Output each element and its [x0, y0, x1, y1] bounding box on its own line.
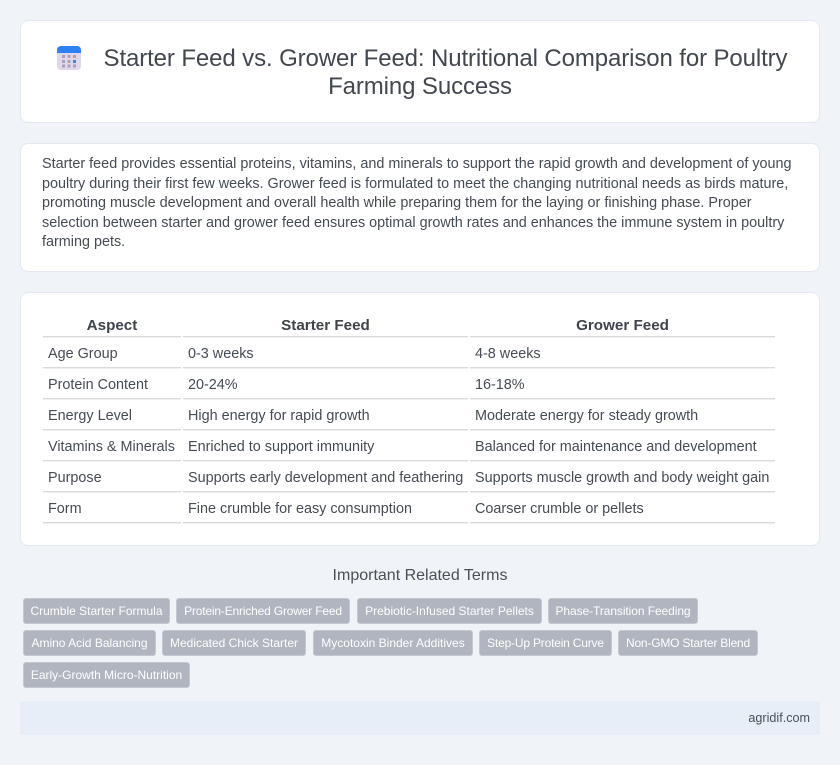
- tag: [479, 630, 612, 656]
- row: purpose: Purpose: [48, 470, 102, 486]
- row: energy level: High energy for rapid growth: [188, 408, 370, 424]
- column headers: Aspect: [87, 317, 137, 334]
- tag: Crumble Starter Formula: [30, 604, 163, 618]
- row: form: [43, 501, 775, 524]
- footer source: agridif.com: [748, 711, 810, 725]
- tag: Mycotoxin Binder Additives: [321, 636, 465, 650]
- row: vitamins and minerals: Enriched to support immunity: [188, 439, 374, 455]
- heading: important related terms: Important Related Terms: [333, 567, 507, 584]
- tag: Step-Up Protein Curve: [487, 636, 604, 650]
- row: protein content: 20-24%: [188, 377, 238, 393]
- text block: introduction: promoting muscle development and overall health while preparing them for the laying or finishing phase. Proper: [42, 195, 752, 211]
- row: form: Fine crumble for easy consumption: [188, 501, 412, 517]
- row: form: Coarser crumble or pellets: [475, 501, 644, 517]
- text block: introduction: farming pets.: [42, 234, 125, 250]
- row: age group: Age Group: [48, 346, 118, 362]
- tag: [23, 598, 170, 624]
- tag: [23, 630, 156, 656]
- title: Starter Feed vs. Grower Feed: Nutritional Comparison for Poultry: [104, 45, 787, 72]
- column headers: Grower Feed: [576, 317, 669, 334]
- tag: [618, 630, 758, 656]
- row: age group: 0-3 weeks: [188, 346, 254, 362]
- row: purpose: Supports muscle growth and body weight gain: [475, 470, 769, 486]
- column headers: [43, 317, 775, 338]
- row: vitamins and minerals: [43, 439, 775, 462]
- footer bar: [20, 701, 820, 735]
- tag: Amino Acid Balancing: [31, 636, 148, 650]
- row: age group: [43, 346, 775, 369]
- tag: Non-GMO Starter Blend: [626, 636, 750, 650]
- text block: introduction: Starter feed provides essential proteins, vitamins, and minerals to support the rapid growth and development of young: [42, 156, 792, 172]
- tag: [162, 630, 306, 656]
- title: [104, 45, 788, 100]
- row: purpose: [43, 470, 775, 493]
- column headers: Starter Feed: [281, 317, 370, 334]
- row: vitamins and minerals: Balanced for maintenance and development: [475, 439, 757, 455]
- row: age group: 4-8 weeks: [475, 346, 541, 362]
- row: protein content: [43, 377, 775, 400]
- panel: comparison table card: [20, 292, 820, 546]
- tag: Phase-Transition Feeding: [555, 604, 691, 618]
- icon: calendar: [57, 46, 81, 70]
- tag: [357, 598, 542, 624]
- tag: [313, 630, 473, 656]
- tag: [176, 598, 350, 624]
- tag: Protein-Enriched Grower Feed: [184, 604, 342, 618]
- row: energy level: Moderate energy for steady growth: [475, 408, 698, 424]
- panel: introduction card: [20, 143, 820, 272]
- tag list: related terms: [23, 598, 758, 688]
- title: Farming Success: [328, 73, 512, 100]
- text block: introduction: [42, 156, 792, 250]
- text block: introduction: poultry during their first few weeks. Grower feed is formulated to meet the changing nutritional needs as birds mature,: [42, 176, 788, 192]
- table: comparison: [43, 317, 775, 524]
- panel: title card: [20, 20, 820, 123]
- tag: Prebiotic-Infused Starter Pellets: [365, 604, 534, 618]
- row: energy level: Energy Level: [48, 408, 132, 424]
- row: energy level: [43, 408, 775, 431]
- tag: Medicated Chick Starter: [170, 636, 298, 650]
- text block: introduction: selection between starter and grower feed ensures optimal growth rates and enhances the immune system in poultry: [42, 214, 784, 230]
- tag: [548, 598, 698, 624]
- row: form: Form: [48, 501, 82, 517]
- row: purpose: Supports early development and feathering: [188, 470, 463, 486]
- row: protein content: Protein Content: [48, 377, 148, 393]
- row: protein content: 16-18%: [475, 377, 525, 393]
- tag: Early-Growth Micro-Nutrition: [31, 668, 182, 682]
- tag: [23, 662, 190, 688]
- row: vitamins and minerals: Vitamins & Minerals: [48, 439, 175, 455]
